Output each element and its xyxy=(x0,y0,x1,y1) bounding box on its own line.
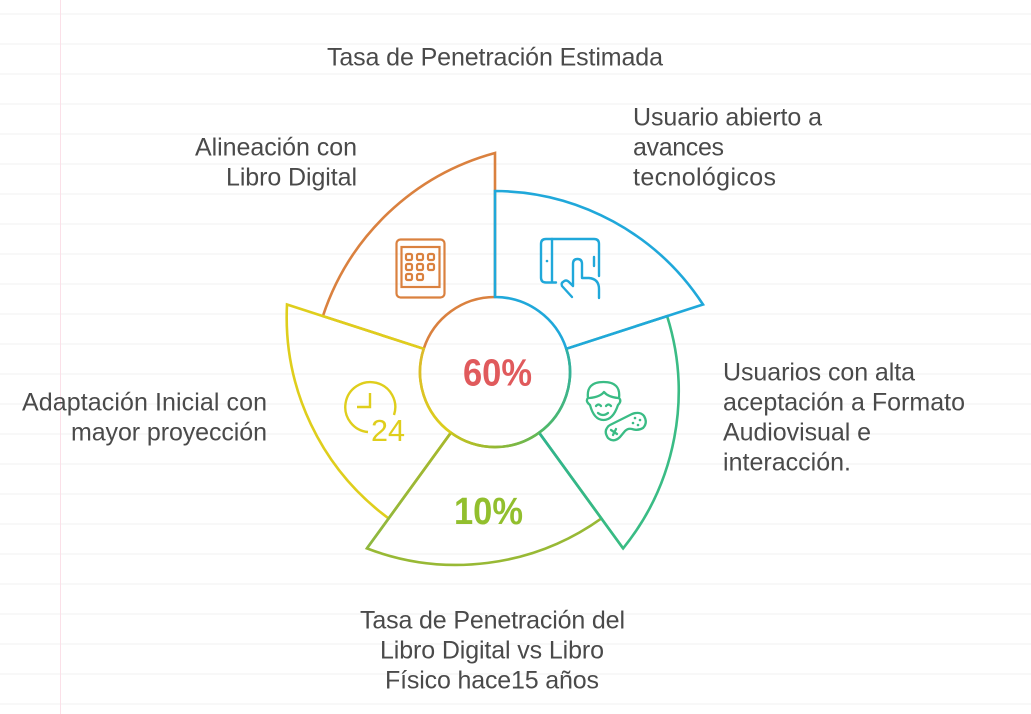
label: bottom: Tasa de Penetración del xyxy=(360,606,625,634)
label: bottom: Físico hace15 años xyxy=(385,666,599,694)
label: right: aceptación a Formato xyxy=(723,388,965,416)
label: top left xyxy=(195,134,357,192)
segment edge: teal side xyxy=(539,433,623,548)
label: right: Usuarios con alta xyxy=(723,358,915,386)
label: left xyxy=(22,388,267,446)
label: bottom: Libro Digital vs Libro xyxy=(380,636,604,664)
center ring: teal arc xyxy=(539,349,570,433)
panel: blue segment xyxy=(495,191,703,349)
label: top left: Alineación con xyxy=(195,134,357,162)
segment value: 10%: 10% xyxy=(454,491,523,533)
label: right: Audiovisual e xyxy=(723,418,871,446)
icon: tablet with touching hand xyxy=(541,239,599,298)
label: bottom xyxy=(360,606,625,694)
label: top right: Usuario abierto a xyxy=(633,104,822,132)
segment edge: lime side xyxy=(367,433,451,548)
radial chart xyxy=(287,153,703,565)
panel: lime segment xyxy=(367,433,601,565)
label: right: interacción. xyxy=(723,448,851,476)
label: left: mayor proyección xyxy=(71,418,267,446)
label: top right: avances xyxy=(633,134,724,162)
icon: child face with game controller xyxy=(587,382,646,440)
label: right xyxy=(723,358,965,476)
center ring: lime arc xyxy=(451,433,539,447)
panel: orange segment xyxy=(323,153,495,349)
label: top left: Libro Digital xyxy=(226,164,357,192)
center value: 60%: 60% xyxy=(463,352,532,394)
icon part: game controller xyxy=(606,413,646,440)
icon part: 24: 24 xyxy=(371,413,405,448)
title: Tasa de Penetración Estimada xyxy=(327,44,663,72)
center ring: yellow arc xyxy=(420,349,451,433)
panel: yellow segment xyxy=(287,304,451,518)
label: top right xyxy=(633,104,822,192)
icon part: face xyxy=(587,382,620,420)
label: top right: tecnológicos xyxy=(633,164,776,192)
icon: 24-hour clock xyxy=(345,382,405,448)
label: left: Adaptación Inicial con xyxy=(22,388,267,416)
panel: teal segment xyxy=(539,316,679,548)
icon: tablet with keypad xyxy=(396,240,444,298)
